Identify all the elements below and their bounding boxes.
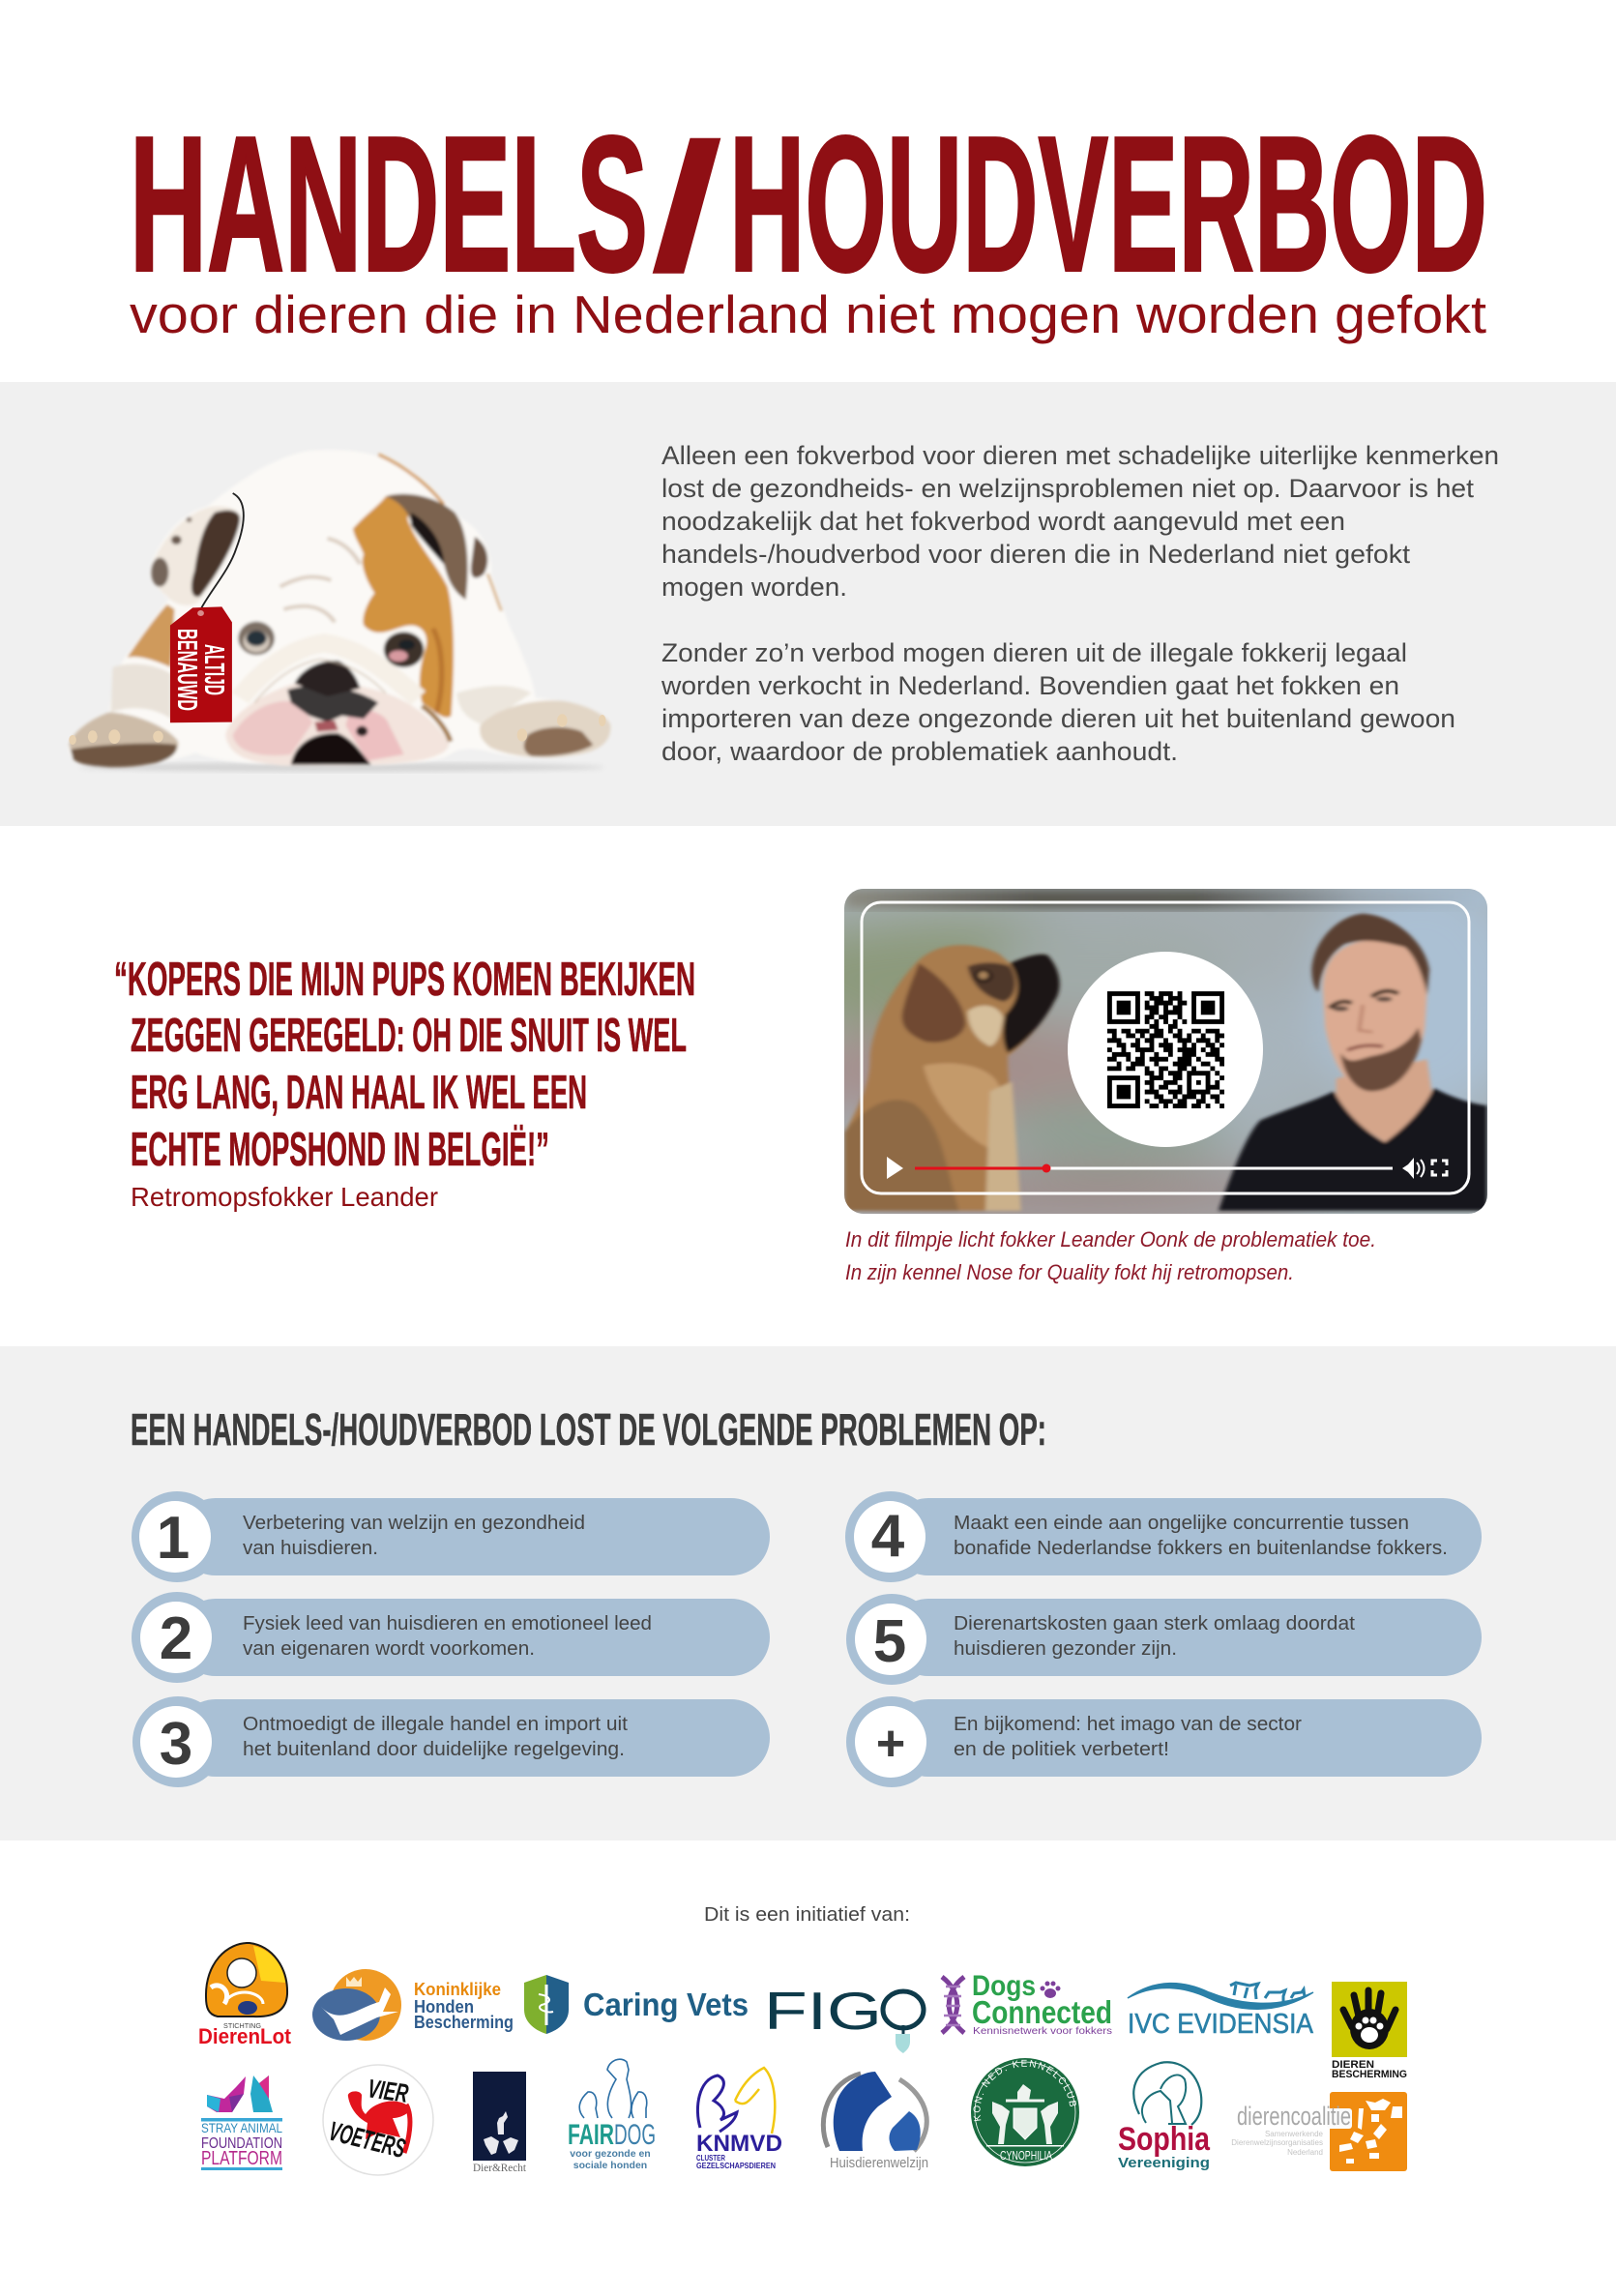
item 3: [132, 1696, 770, 1787]
item 1: Verbetering van welzijn en gezondheid: [243, 1513, 585, 1534]
wrinkles: [280, 539, 360, 622]
item 5: huisdieren gezonder zijn.: [954, 1638, 1177, 1660]
item 3: 3: [160, 1711, 192, 1778]
background band: intro: [0, 382, 1616, 826]
logo: KNMvD: KNMVD: [696, 2131, 782, 2157]
paws: [69, 713, 178, 767]
main heading: /: [650, 105, 723, 309]
item 2: Fysiek leed van huisdieren en emotioneel leed: [243, 1613, 652, 1634]
logo: FairDog: sociale honden: [573, 2160, 647, 2171]
logo: Dier&Recht: Dier&Recht: [473, 2161, 527, 2174]
logo: Vier Voeters: VOETERS: [326, 2116, 408, 2164]
logo: Huisdierenwelzijn: Huisdierenwelzijn: [830, 2155, 928, 2171]
logo: Dierencoalitie: Dierenwelzijnsorganisaties: [1231, 2138, 1323, 2147]
illustration: bulldog with tag: ALTIJD: [198, 644, 229, 695]
logo: Cynophilia: KON. NED. KENNELCLUB: [973, 2060, 1076, 2122]
item 5: Dierenartskosten gaan sterk omlaag doordat: [954, 1613, 1355, 1634]
tag string: [201, 493, 244, 609]
logo: IVC Evidensia: [1128, 1983, 1314, 2040]
volume icon: [1402, 1158, 1424, 1179]
logo: FairDog: voor gezonde en: [570, 2148, 651, 2160]
intro text: noodzakelijk dat het fokverbod wordt aangevuld met een: [661, 507, 1345, 536]
logo: DierenLot: DierenLot: [198, 2024, 292, 2048]
quote: “KOPERS DIE MIJN PUPS KOMEN BEKIJKEN: [114, 954, 695, 1006]
quote: ECHTE MOPSHOND IN BELGIË!”: [131, 1124, 549, 1176]
illustration: bulldog with tag: [69, 450, 610, 772]
intro text: door, waardoor de problematiek aanhoudt.: [661, 737, 1178, 766]
logo: Stray Animal Foundation Platform: FOUNDATION: [201, 2135, 282, 2152]
item 5: [846, 1594, 1482, 1685]
video caption: In zijn kennel Nose for Quality fokt hij retromopsen.: [845, 1260, 1294, 1284]
logo: IVC Evidensia: IVC EVIDENSIA: [1128, 2009, 1314, 2040]
intro text: Zonder zo’n verbod mogen dieren uit de illegale fokkerij legaal: [661, 638, 1407, 667]
logo: Stray Animal Foundation Platform: PLATFORM: [201, 2148, 282, 2169]
logo: KNMvD: [696, 2068, 782, 2170]
logo: Caring Vets: [524, 1975, 749, 2034]
logo: Koninklijke Honden Bescherming: Honden: [414, 1997, 474, 2016]
subtitle: voor dieren die in Nederland niet mogen worden gefokt: [130, 284, 1486, 344]
initiative line: Dit is een initiatief van:: [704, 1904, 910, 1926]
photo: man: [1219, 914, 1487, 1211]
intro text: [661, 441, 1499, 766]
quote: [114, 954, 695, 1212]
logo: KNMvD: GEZELSCHAPSDIEREN: [696, 2162, 776, 2170]
intro text: handels-/houdverbod voor dieren die in Nederland niet gefokt: [661, 540, 1411, 569]
orange patch: [353, 494, 454, 718]
item 3: Ontmoedigt de illegale handel en import uit: [243, 1714, 628, 1735]
logo: Dogs Connected: Dogs: [972, 1970, 1036, 2002]
logo: Koninklijke Honden Bescherming: Bescherming: [414, 2013, 514, 2032]
logo: DierenLot: STICHTING: [223, 2021, 261, 2030]
quote attribution: Retromopsfokker Leander: [131, 1182, 438, 1212]
logo: FairDog: [568, 2059, 656, 2171]
item 4: Maakt een einde aan ongelijke concurrentie tussen: [954, 1513, 1409, 1534]
intro text: mogen worden.: [661, 573, 847, 602]
eyes: [238, 622, 275, 655]
item 2: [132, 1592, 770, 1683]
logo: Dierencoalitie: Samenwerkende: [1265, 2130, 1324, 2138]
logo: Dogs Connected: Kennisnetwerk voor fokkers: [973, 2026, 1112, 2037]
logo: Vier Voeters: [323, 2065, 433, 2175]
muzzle fold: [240, 643, 419, 698]
problems heading: EEN HANDELS-/HOUDVERBOD LOST DE VOLGENDE PROBLEMEN OP:: [131, 1404, 1046, 1455]
intro text: importeren van deze ongezonde dieren uit het buitenland gewoon: [661, 704, 1455, 733]
quote: ZEGGEN GEREGELD: OH DIE SNUIT IS WEL: [131, 1010, 687, 1062]
logo: Sophia Vereeniging: Vereeniging: [1118, 2155, 1210, 2171]
logo: FIGO: FIG: [764, 1981, 882, 2041]
logo: Dierencoalitie: dierencoalitie: [1237, 2102, 1351, 2131]
item plus: En bijkomend: het imago van de sector: [954, 1714, 1302, 1735]
item 4: [845, 1491, 1482, 1582]
right lower folds: [422, 706, 451, 742]
left flank orange: [128, 604, 174, 667]
intro text: lost de gezondheids- en welzijnsproblemen niet op. Daarvoor is het: [661, 474, 1475, 503]
item 4: bonafide Nederlandse fokkers en buitenlandse fokkers.: [954, 1538, 1448, 1559]
photo: pug: [844, 945, 1060, 1211]
logo: Dogs Connected: Connected: [972, 1994, 1112, 2030]
video caption: [845, 1227, 1376, 1284]
logos: [198, 1942, 1407, 2176]
logo: Dogs Connected: [942, 1970, 1112, 2037]
logo: Sophia Vereeniging: Sophia: [1118, 2121, 1211, 2158]
logo: Dierencoalitie: [1231, 2092, 1407, 2171]
logo: Dierenbescherming: DIEREN: [1332, 2059, 1374, 2071]
progress bar: [915, 1164, 1393, 1172]
logo: Koninklijke Honden Bescherming: [312, 1969, 514, 2041]
item 2: 2: [160, 1605, 192, 1672]
main heading: [130, 97, 1487, 311]
logo: Sophia Vereeniging: [1118, 2062, 1211, 2171]
item 2: van eigenaren wordt voorkomen.: [243, 1638, 535, 1660]
illustration: bulldog with tag: BENAUWD: [171, 629, 202, 711]
lower face: [225, 681, 450, 766]
intro text: Alleen een fokverbod voor dieren met schadelijke uiterlijke kenmerken: [661, 441, 1499, 470]
logo: KNMvD: CLUSTER: [696, 2154, 725, 2163]
logo: Huisdierenwelzijn: [823, 2072, 928, 2171]
logo: FairDog: FAIR: [568, 2119, 614, 2151]
logo: Cynophilia: [971, 2058, 1079, 2166]
logo: Stray Animal Foundation Platform: [201, 2075, 282, 2170]
logo: Dierenbescherming: [1332, 1982, 1407, 2080]
item 1: [132, 1491, 770, 1582]
logo: Dierenbescherming: BESCHERMING: [1332, 2069, 1407, 2080]
item 4: 4: [871, 1503, 905, 1570]
logo: Vier Voeters: VIER: [366, 2074, 410, 2108]
item 1: van huisdieren.: [243, 1538, 378, 1559]
body silhouette: [69, 450, 610, 767]
logo: Caring Vets: Caring Vets: [583, 1987, 749, 2022]
quote: ERG LANG, DAN HAAL IK WEL EEN: [131, 1067, 587, 1119]
item 5: 5: [873, 1608, 906, 1675]
intro text: worden verkocht in Nederland. Bovendien gaat het fokken en: [661, 671, 1399, 700]
player frame: [862, 902, 1469, 1193]
QR code: [1068, 952, 1263, 1147]
logo: FairDog: DOG: [614, 2119, 656, 2151]
fullscreen icon: [1432, 1161, 1447, 1175]
logo: DierenLot: [198, 1943, 292, 2048]
video panel: [844, 889, 1487, 1214]
logo: Dierencoalitie: Nederland: [1287, 2148, 1323, 2157]
title: [130, 97, 1487, 344]
logo: Stray Animal Foundation Platform: STRAY ANIMAL: [201, 2120, 282, 2135]
play icon: [887, 1157, 903, 1179]
logo: Koninklijke Honden Bescherming: Koninklijke: [414, 1980, 501, 1999]
left ear: [151, 506, 240, 605]
item plus: en de politiek verbetert!: [954, 1739, 1169, 1760]
item plus: [846, 1696, 1482, 1787]
logo: Dier&Recht: [473, 2072, 527, 2174]
item plus: +: [876, 1716, 905, 1772]
item 1: 1: [157, 1505, 190, 1572]
logo: FIGO: [764, 1981, 924, 2053]
item 3: het buitenland door duidelijke regelgeving.: [243, 1739, 625, 1760]
background band: problems: [0, 1346, 1616, 1840]
red tag: [170, 606, 232, 722]
video background: [844, 889, 1487, 1214]
video caption: In dit filmpje licht fokker Leander Oonk de problematiek toe.: [845, 1227, 1376, 1251]
logo: Cynophilia: CYNOPHILIA: [1000, 2148, 1052, 2163]
main heading: HANDELS: [130, 97, 648, 311]
right ear: [386, 494, 468, 600]
